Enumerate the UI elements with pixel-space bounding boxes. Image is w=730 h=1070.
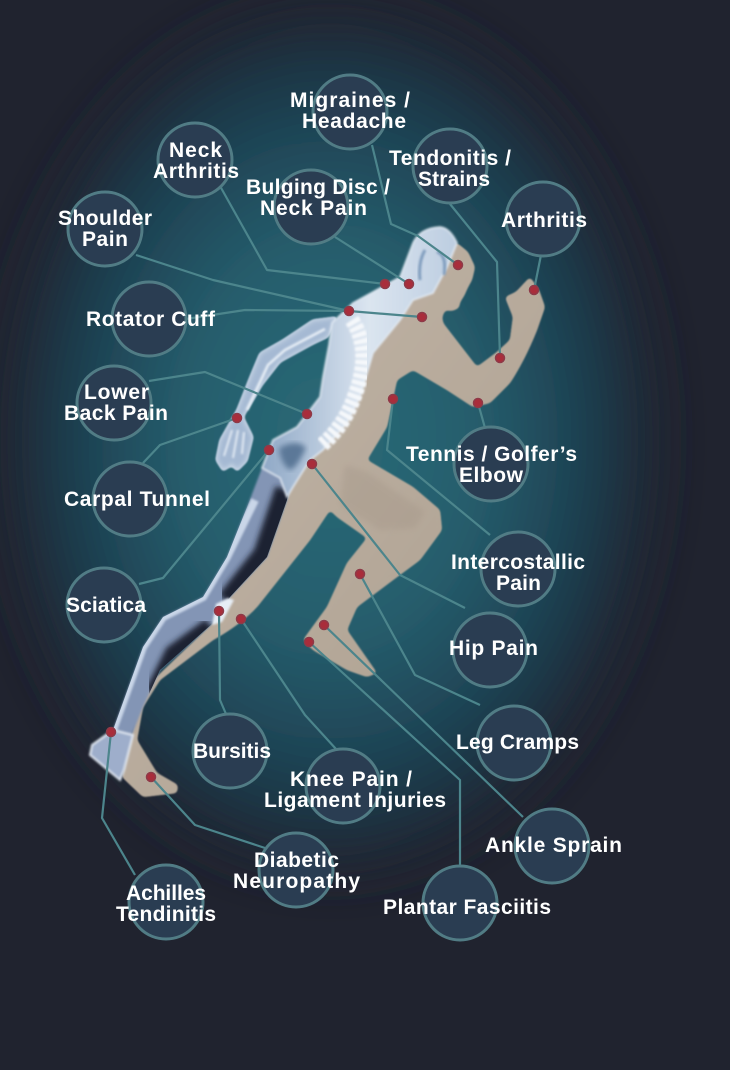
label: Plantar Fasciitis: Plantar Fasciitis (383, 896, 551, 919)
label: Achilles Tendinitis (116, 865, 216, 939)
label: Knee Pain / Ligament Injuries: Ligament Injuries (264, 789, 446, 812)
label: Lower Back Pain: Back Pain (64, 402, 168, 425)
label: Sciatica: Sciatica (66, 594, 146, 617)
label: Neck Arthritis: Arthritis (153, 160, 239, 183)
label: Knee Pain / Ligament Injuries (264, 749, 446, 823)
label: Lower Back Pain (64, 366, 168, 440)
label: Diabetic Neuropathy (233, 833, 360, 907)
label: Carpal Tunnel (64, 462, 210, 536)
label: Arthritis: Arthritis (501, 209, 587, 232)
label: Plantar Fasciitis (383, 866, 551, 940)
label: Hip Pain (449, 613, 538, 687)
label: Leg Cramps (456, 706, 579, 780)
label: Shoulder Pain: Shoulder (58, 207, 152, 230)
label: Intercostallic Pain: Pain (496, 572, 541, 595)
pain points (106, 260, 538, 782)
label: Diabetic Neuropathy: Neuropathy (233, 870, 360, 893)
label: Neck Arthritis (153, 123, 239, 197)
label: Rotator Cuff (86, 282, 216, 356)
label: Intercostallic Pain: Intercostallic (451, 551, 585, 574)
teal glow behind figure (5, 10, 655, 870)
label: Arthritis (501, 182, 587, 256)
spine (322, 320, 363, 445)
label: Tennis / Golfer's Elbow (406, 427, 577, 501)
running figure (90, 227, 545, 797)
label: Tennis / Golfer's Elbow: Tennis / Golfer’s (406, 443, 577, 466)
label: Neck Arthritis: Neck (169, 139, 222, 162)
label: Tendonitis / Strains: Strains (418, 168, 490, 191)
skull detail (420, 250, 445, 280)
knee joint highlight (212, 598, 234, 625)
label: Bulging Disc / Neck Pain (246, 170, 390, 244)
label: Shoulder Pain (58, 192, 152, 266)
label: Leg Cramps: Leg Cramps (456, 731, 579, 754)
label: Migraines / Headache (290, 75, 410, 149)
label: Knee Pain / Ligament Injuries: Knee Pain / (290, 768, 412, 791)
skin: body, front arm and legs (122, 243, 545, 797)
foot bones, x-ray (90, 730, 133, 780)
back leg, x-ray (113, 468, 293, 740)
label: Ankle Sprain: Ankle Sprain (485, 834, 622, 857)
label: Tendonitis / Strains: Tendonitis / (389, 147, 511, 170)
label: Tennis / Golfer's Elbow: Elbow (459, 464, 524, 487)
label: Rotator Cuff: Rotator Cuff (86, 308, 216, 331)
label: Carpal Tunnel: Carpal Tunnel (64, 488, 210, 511)
label: Sciatica (66, 568, 146, 642)
pelvis shadow (279, 443, 306, 470)
label: Achilles Tendinitis: Tendinitis (116, 903, 216, 926)
skin shading (340, 465, 425, 530)
label: Bulging Disc / Neck Pain: Bulging Disc / (246, 176, 390, 199)
label: Lower Back Pain: Lower (84, 381, 149, 404)
back arm, x-ray (216, 317, 337, 471)
label: Migraines / Headache: Headache (302, 110, 406, 133)
label: Diabetic Neuropathy: Diabetic (254, 849, 339, 872)
label: Ankle Sprain (485, 809, 622, 883)
label: Migraines / Headache: Migraines / (290, 89, 410, 112)
label: Hip Pain: Hip Pain (449, 637, 538, 660)
label: Bursitis: Bursitis (193, 740, 271, 763)
label: Achilles Tendinitis: Achilles (126, 882, 206, 905)
torso, x-ray (262, 227, 457, 497)
connector lines (102, 145, 541, 875)
label: Bursitis (193, 714, 271, 788)
label: Bulging Disc / Neck Pain: Neck Pain (260, 197, 367, 220)
label: Intercostallic Pain (451, 532, 585, 606)
label: Tendonitis / Strains (389, 129, 511, 203)
label: Shoulder Pain: Pain (82, 228, 128, 251)
